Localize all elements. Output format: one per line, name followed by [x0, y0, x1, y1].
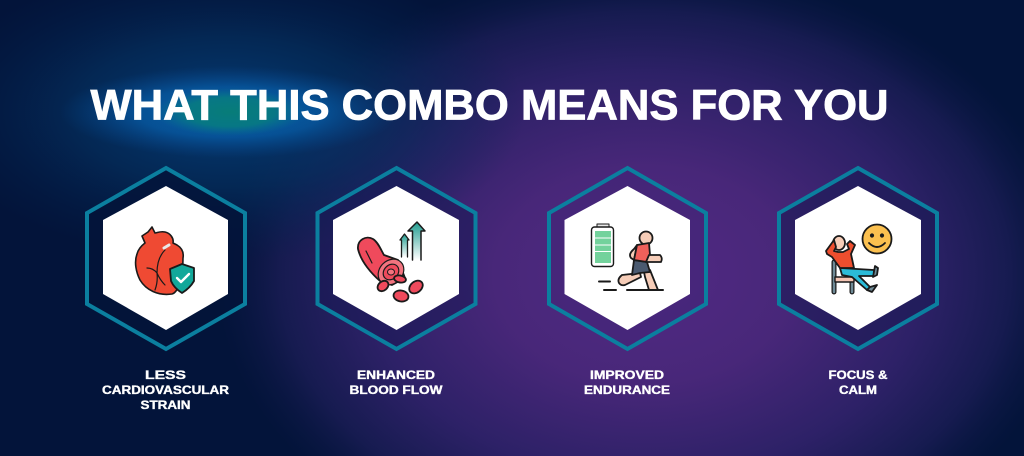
hexagon frame 1 [87, 168, 245, 349]
panel: enhanced blood flow [318, 168, 476, 397]
label: CARDIOVASCULAR [102, 385, 230, 397]
label: IMPROVED [590, 370, 664, 382]
label: CALM [839, 385, 877, 397]
title: WHAT THIS COMBO MEANS FOR YOU [90, 82, 888, 130]
label: LESS [145, 370, 186, 382]
panel: less cardiovascular strain [87, 168, 245, 412]
label: ENDURANCE [584, 385, 670, 397]
label: STRAIN [140, 400, 190, 412]
label: ENHANCED [357, 370, 435, 382]
panel: focus and calm [779, 168, 937, 397]
icon: heart with shield [136, 227, 194, 294]
hexagon frame 3 [549, 168, 706, 349]
hexagon frame 2 [318, 168, 476, 349]
label [584, 370, 670, 397]
panel: improved endurance [549, 168, 706, 397]
label: FOCUS & [828, 370, 888, 382]
label: BLOOD FLOW [350, 385, 443, 397]
icon: blood vessel with arrows [358, 222, 425, 303]
hexagon frame 4 [779, 168, 937, 349]
label [828, 370, 888, 397]
icon: relaxed person and smiley [826, 224, 892, 292]
label [350, 370, 443, 397]
icon: battery and runner [592, 224, 663, 290]
label [102, 370, 230, 412]
